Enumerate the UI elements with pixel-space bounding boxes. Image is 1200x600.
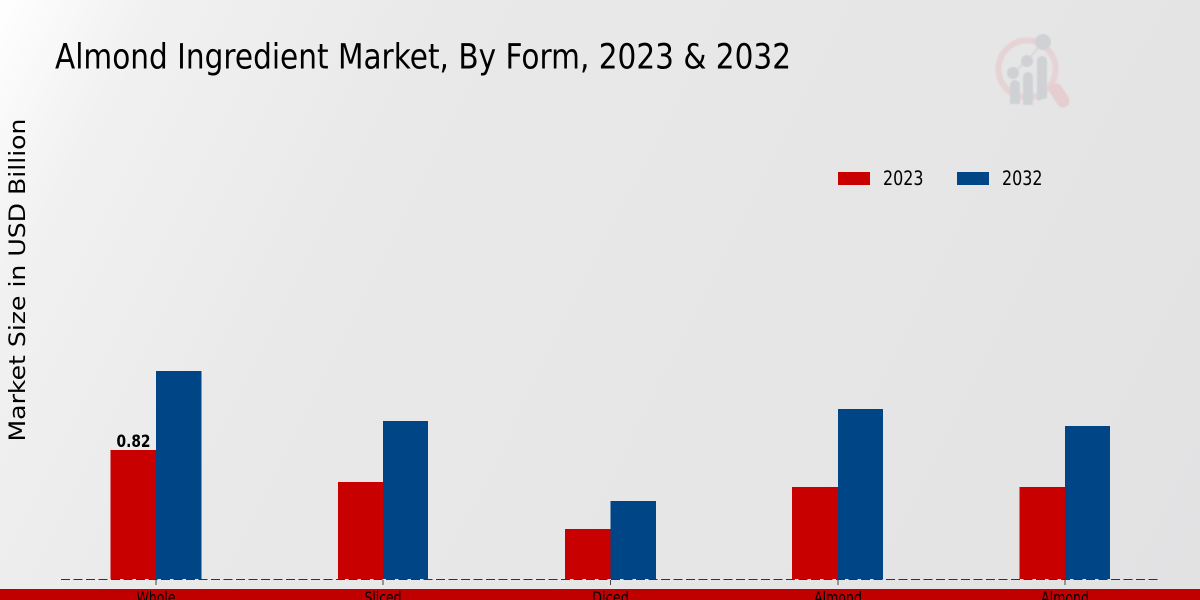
y-axis label: Market Size in USD Billion: [5, 118, 31, 442]
legend item: 2032: 2032: [1002, 167, 1042, 190]
bars: Almond (first): [792, 409, 883, 579]
bar chart: [61, 371, 1159, 585]
legend: [838, 167, 1042, 190]
x-axis labels: [136, 588, 1089, 600]
legend item: 2023: [838, 167, 924, 190]
legend item: 2032: [957, 167, 1042, 190]
data label: 0.82: 0.82: [116, 432, 150, 451]
legend item: 2023: 2023: [883, 167, 924, 190]
bars: Almond (second): [1020, 426, 1110, 579]
x-axis baseline: [61, 578, 1159, 580]
title: Almond Ingredient Market, By Form, 2023 & 2032: [55, 38, 791, 78]
icon: watermark logo: [998, 34, 1063, 105]
bars: Sliced: [338, 421, 428, 579]
bars: Diced: [565, 501, 656, 579]
footer band: [0, 589, 1200, 600]
bars: Whole: [110, 371, 202, 579]
